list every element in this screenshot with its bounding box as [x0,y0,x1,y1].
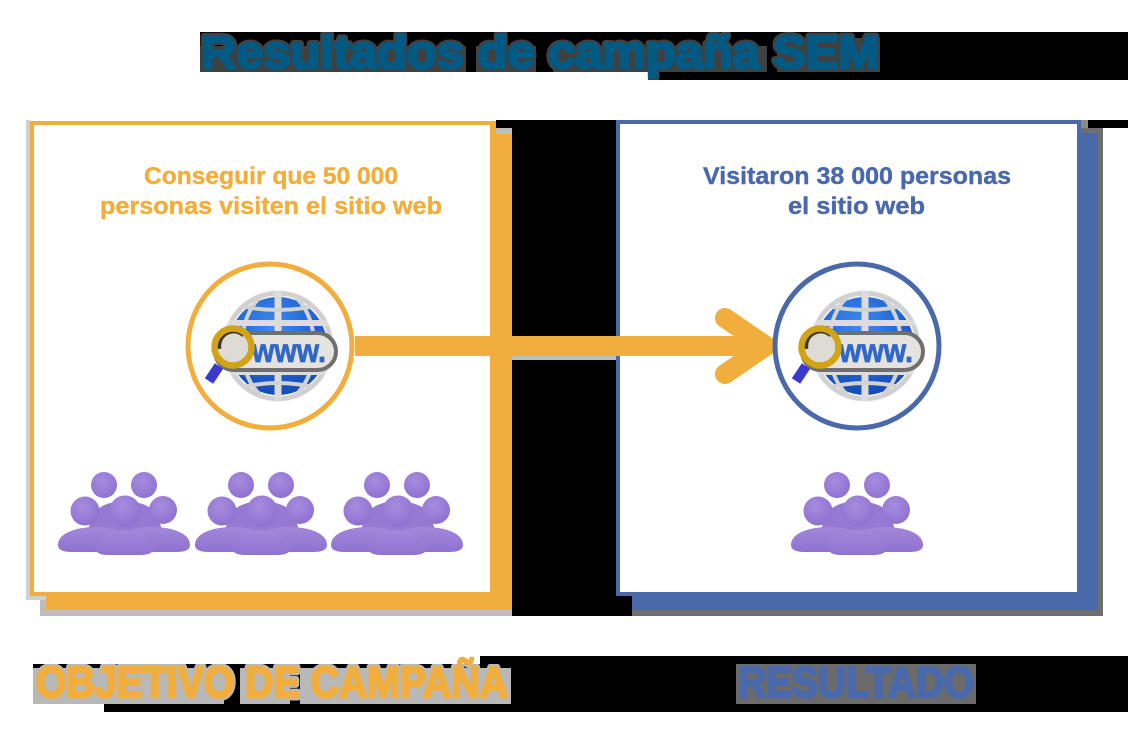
icon: result website circle [775,264,939,428]
label: objetivo de campaña: OBJETIVO DE CAMPAÑA [36,657,508,707]
objective text: Conseguir que 50 000 [144,163,398,190]
panel: resultado [616,120,1103,616]
icon: people group 2 [195,472,327,555]
title: Resultados de campaña SEM [201,26,879,78]
panel: objetivo de campaña [26,120,512,616]
result text [703,163,1011,220]
title: Resultados de campaña SEM [201,26,879,78]
label: resultado: RESULTADO [738,658,974,707]
icon: objective website circle [188,264,352,428]
icon: people group 3 [331,472,463,555]
label: objetivo de campaña: OBJETIVO DE CAMPAÑA [36,657,508,707]
icon: people group 1 [58,472,190,555]
result text: el sitio web [788,193,925,220]
result text: Visitaron 38 000 personas [703,163,1011,190]
objective text: personas visiten el sitio web [100,193,442,220]
arrow [355,318,766,374]
objective text [100,163,442,220]
icon: people group result [791,472,923,555]
